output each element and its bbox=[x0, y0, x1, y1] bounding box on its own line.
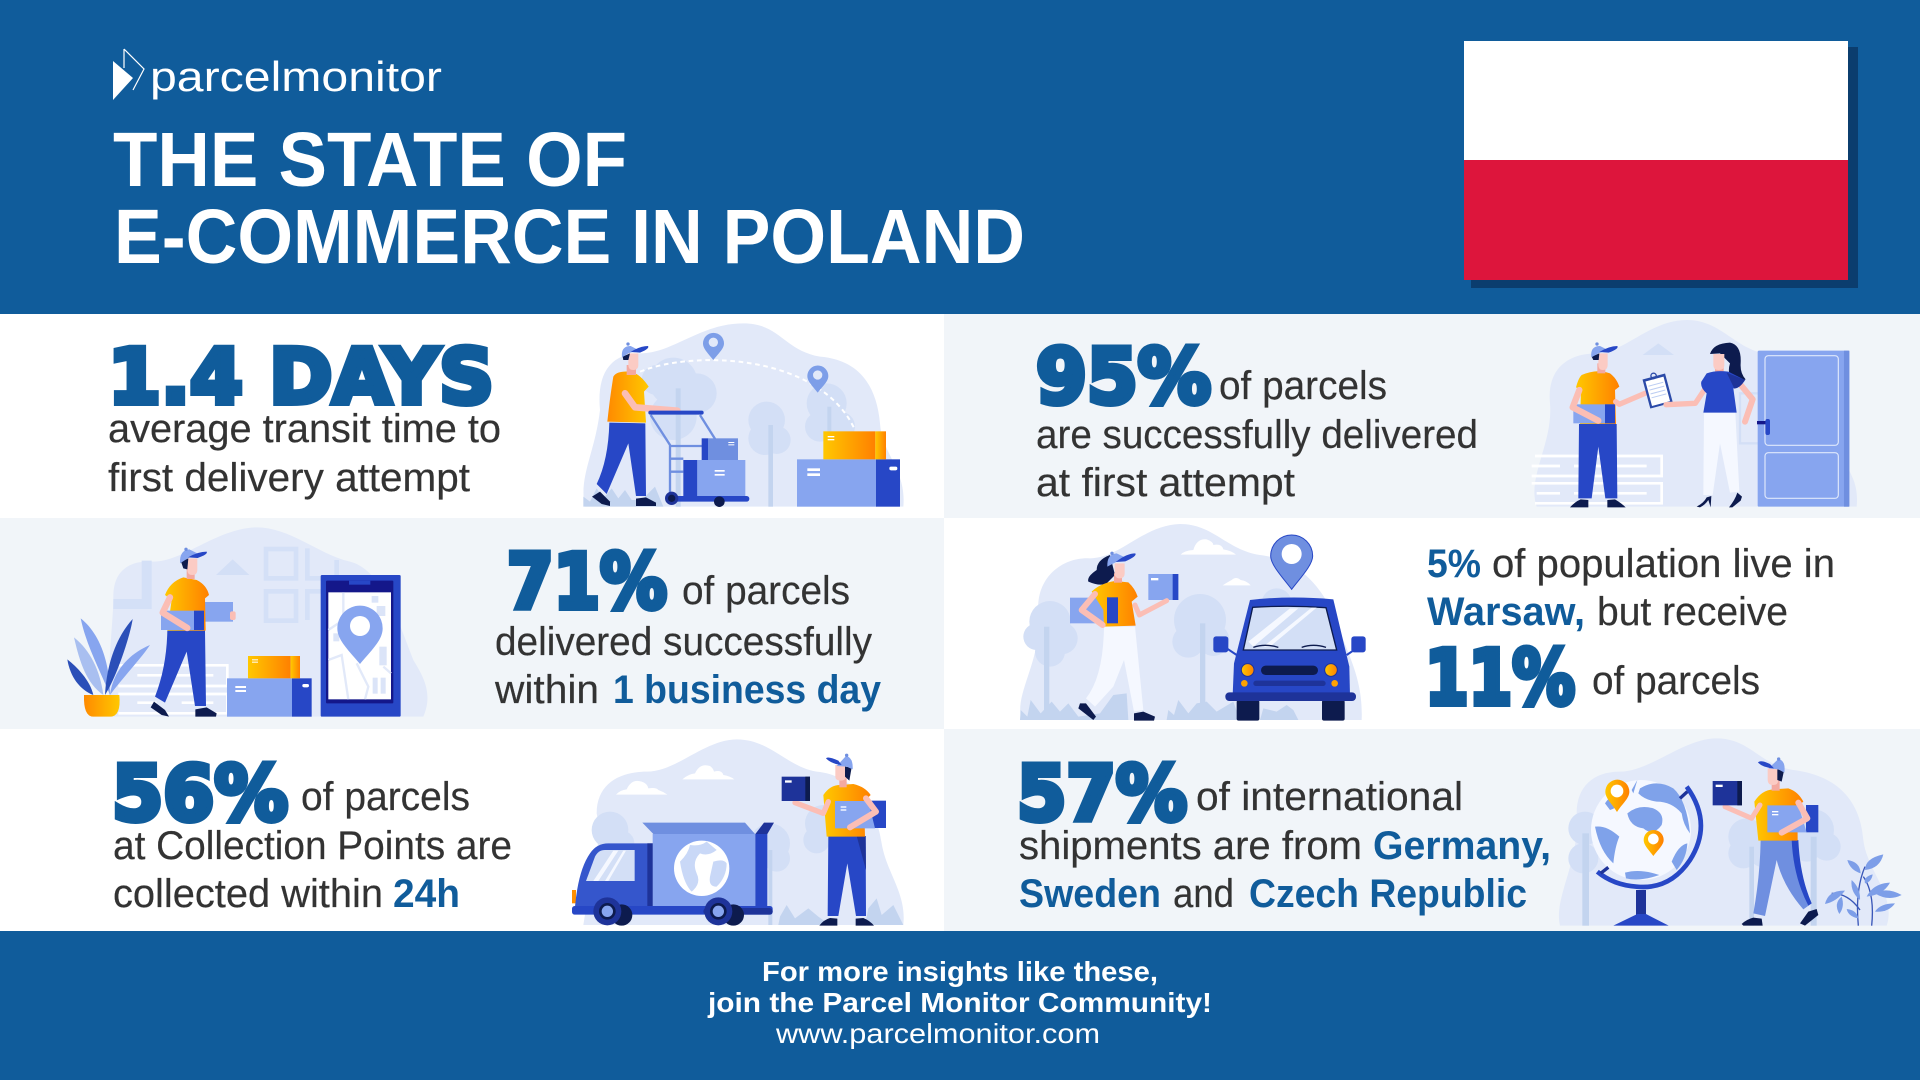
illustration: courier hands clipboard bbox=[1532, 320, 1857, 507]
text: of international shipments: and bbox=[1173, 872, 1234, 916]
footer band bbox=[0, 931, 1920, 1080]
text: of parcels delivered successfully: 1 business day bbox=[613, 668, 882, 712]
text: of parcels delivered successfully: of parcels bbox=[682, 569, 850, 613]
illustration: delivery truck and courier bbox=[572, 739, 904, 926]
stat: 71%: 71% bbox=[507, 537, 667, 626]
stat: 11%: 11% bbox=[1425, 633, 1575, 722]
illustration: courier and delivery van bbox=[1020, 524, 1366, 721]
text: of parcels delivered: are successfully delivered bbox=[1036, 413, 1478, 457]
stat: 1.4 days: 1.4 DAYS bbox=[108, 332, 494, 421]
illustration: courier with phone and plant bbox=[67, 527, 427, 717]
title: E-COMMERCE IN POLAND bbox=[114, 194, 1025, 280]
text: of international shipments: shipments are from bbox=[1019, 824, 1362, 868]
panel: 95% delivered at first attempt bbox=[944, 314, 1920, 518]
text: 5% of population in Warsaw: 5% bbox=[1427, 542, 1481, 586]
footer call to action: join the Parcel Monitor Community! bbox=[707, 987, 1212, 1018]
text: of parcels delivered: at first attempt bbox=[1036, 461, 1295, 505]
illustration: globe and courier bbox=[1559, 738, 1902, 926]
header band bbox=[0, 0, 1920, 314]
text: average transit time: average transit time to bbox=[108, 407, 501, 451]
logo: parcelmonitor: parcelmonitor bbox=[150, 53, 442, 100]
text: of parcels delivered successfully: within bbox=[494, 668, 599, 712]
text: 5% of population in Warsaw: of population live in bbox=[1492, 542, 1835, 586]
text: of international shipments: Germany, bbox=[1373, 824, 1551, 868]
footer call to action: For more insights like these, bbox=[762, 956, 1158, 987]
illustration: courier with cart bbox=[583, 323, 904, 507]
text: of parcels delivered successfully bbox=[494, 569, 882, 712]
text: of international shipments: Sweden bbox=[1019, 872, 1161, 916]
stat: 95%: 95% bbox=[1036, 332, 1211, 421]
text: of parcels at collection points: 24h bbox=[393, 872, 460, 916]
panel: 57% international shipments bbox=[944, 729, 1920, 931]
text: of parcels at collection points bbox=[113, 775, 512, 916]
text: of international shipments: Czech Republic bbox=[1249, 872, 1527, 916]
text: of parcels: of parcels bbox=[1592, 659, 1760, 703]
text: 5% of population in Warsaw: but receive bbox=[1597, 590, 1788, 634]
panel: 56% collected within 24h bbox=[0, 729, 944, 931]
text: of parcels at collection points: at Collection Points are bbox=[113, 824, 512, 868]
text: 5% of population in Warsaw bbox=[1427, 542, 1835, 634]
text: of parcels at collection points: collected within bbox=[113, 872, 383, 916]
flag of Poland bbox=[1464, 41, 1858, 288]
text: of parcels delivered: of parcels bbox=[1219, 364, 1387, 408]
text: 5% of population in Warsaw: Warsaw, bbox=[1427, 590, 1585, 634]
text: of international shipments bbox=[1019, 775, 1551, 916]
panel: 71% delivered within 1 business day bbox=[0, 518, 944, 729]
text: of parcels at collection points: of parcels bbox=[301, 775, 470, 819]
text: of international shipments: of international bbox=[1196, 775, 1463, 819]
footer call to action: www.parcelmonitor.com bbox=[775, 1018, 1100, 1049]
text: of parcels delivered bbox=[1036, 364, 1478, 505]
title: THE STATE OF bbox=[113, 117, 627, 203]
text: average transit time: first delivery attempt bbox=[108, 456, 470, 500]
text: average transit time bbox=[108, 407, 501, 500]
title bbox=[113, 117, 1025, 280]
text: of parcels delivered successfully: delivered successfully bbox=[495, 620, 872, 664]
stat: 56%: 56% bbox=[112, 749, 288, 838]
panel: Warsaw 5% population 11% parcels bbox=[944, 518, 1920, 729]
panel: 1.4 days transit bbox=[0, 314, 944, 518]
footer call to action bbox=[707, 956, 1212, 1049]
stat: 57%: 57% bbox=[1017, 749, 1187, 838]
